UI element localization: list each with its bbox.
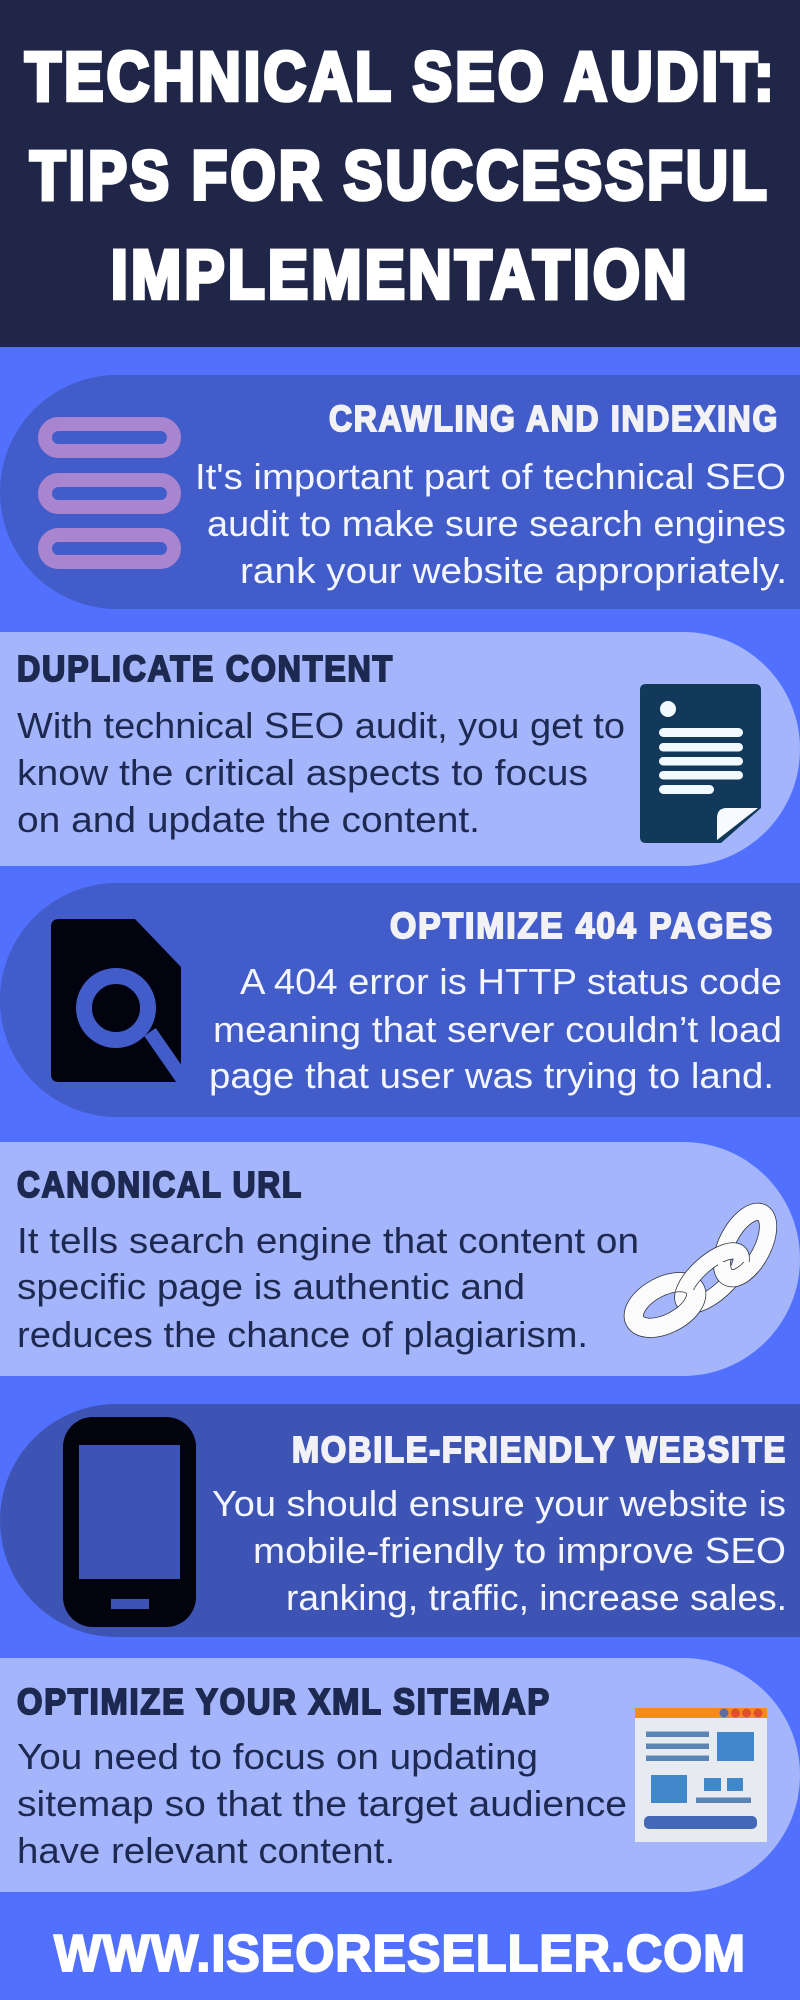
panel: canonical url bbox=[0, 1142, 800, 1376]
icon: document bbox=[640, 684, 761, 843]
text block: mobile-friendly website: You should ensure your website is bbox=[212, 1483, 786, 1524]
text block: crawling and indexing: rank your website appropriately. bbox=[240, 550, 787, 591]
text block: canonical url bbox=[17, 1220, 639, 1355]
icon: stacked server pills bbox=[45, 424, 174, 562]
title banner: IMPLEMENTATION bbox=[111, 236, 690, 313]
heading: optimize your xml sitemap: OPTIMIZE YOUR XML SITEMAP bbox=[17, 1681, 551, 1722]
text block: duplicate content: With technical SEO audit, you get to bbox=[17, 705, 625, 746]
text block: optimize 404 pages: A 404 error is HTTP status code bbox=[240, 961, 782, 1002]
panel: optimize your xml sitemap bbox=[0, 1658, 800, 1892]
icon: chain links bbox=[626, 1205, 778, 1337]
text block: mobile-friendly website: mobile-friendly to improve SEO bbox=[253, 1530, 786, 1571]
text block: optimize 404 pages bbox=[209, 961, 782, 1096]
text block: crawling and indexing: It's important part of technical SEO bbox=[195, 456, 786, 497]
text block: duplicate content: know the critical aspects to focus bbox=[17, 752, 588, 793]
text block: crawling and indexing: audit to make sure search engines bbox=[207, 503, 786, 544]
text block: optimize 404 pages: page that user was trying to land. bbox=[209, 1055, 774, 1096]
text block: optimize your xml sitemap bbox=[17, 1736, 627, 1871]
icon: browser window sitemap bbox=[635, 1708, 767, 1842]
heading: duplicate content: DUPLICATE CONTENT bbox=[17, 648, 394, 689]
panel: duplicate content bbox=[0, 632, 800, 866]
text block: mobile-friendly website: ranking, traffic, increase sales. bbox=[286, 1577, 787, 1618]
footer url: WWW.ISEORESELLER.COM bbox=[54, 1925, 746, 1983]
title banner bbox=[0, 0, 800, 347]
text block: crawling and indexing bbox=[195, 456, 787, 591]
heading: optimize 404 pages: OPTIMIZE 404 PAGES bbox=[390, 905, 774, 946]
text block: optimize 404 pages: meaning that server couldn’t load bbox=[213, 1009, 782, 1050]
icon: file with magnifier bbox=[51, 919, 186, 1084]
panel: crawling and indexing bbox=[0, 375, 800, 609]
icon: smartphone bbox=[63, 1417, 196, 1627]
text block: optimize your xml sitemap: have relevant content. bbox=[17, 1830, 395, 1871]
text block: canonical url: It tells search engine that content on bbox=[17, 1220, 639, 1261]
text block: optimize your xml sitemap: You need to focus on updating bbox=[17, 1736, 538, 1777]
text block: mobile-friendly website bbox=[212, 1483, 787, 1618]
text block: canonical url: specific page is authentic and bbox=[17, 1266, 525, 1307]
text block: canonical url: reduces the chance of plagiarism. bbox=[17, 1314, 588, 1355]
text block: duplicate content: on and update the content. bbox=[17, 799, 480, 840]
text block: optimize your xml sitemap: sitemap so that the target audience bbox=[17, 1783, 627, 1824]
heading: canonical url: CANONICAL URL bbox=[17, 1164, 303, 1205]
panel: optimize 404 pages bbox=[0, 883, 800, 1117]
panel: mobile-friendly website bbox=[0, 1404, 800, 1637]
text block: duplicate content bbox=[17, 705, 625, 840]
